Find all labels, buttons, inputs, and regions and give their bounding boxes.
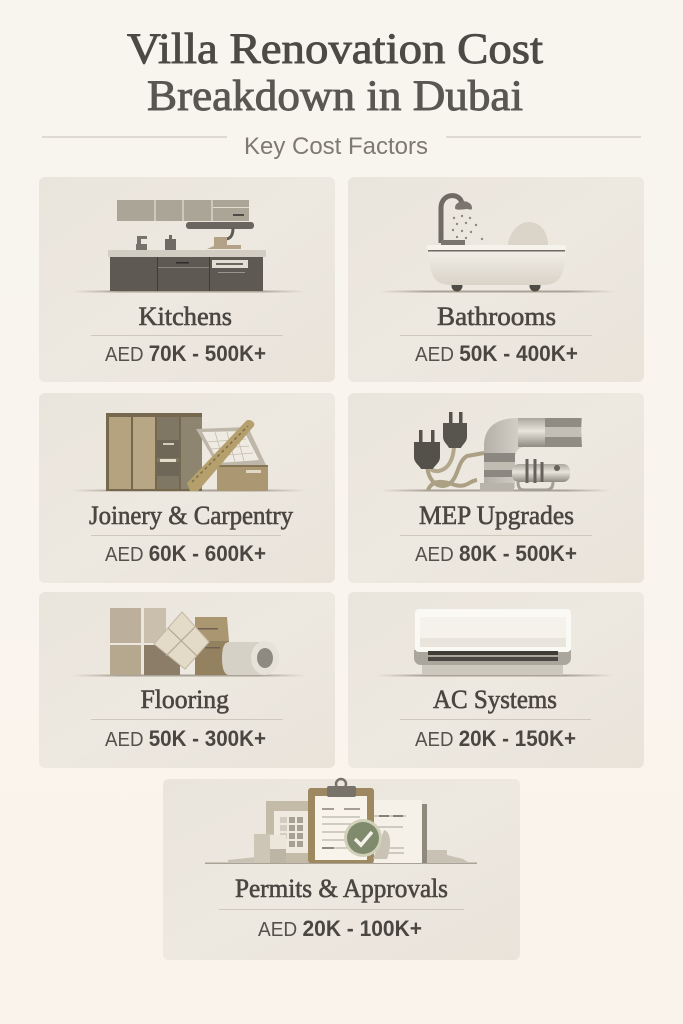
label: permits and approvals: Permits & Approvals [235,874,448,903]
label: joinery and carpentry: Joinery & Carpentry [89,501,293,530]
panel: AC systems [348,592,644,768]
label: MEP upgrades: MEP Upgrades [419,501,574,530]
label: AC systems: AC Systems [433,685,557,714]
panel: bathrooms [348,177,644,382]
panel: kitchens [39,177,335,382]
icon: kitchen [72,200,305,292]
price: bathrooms: AED 50K - 400K+ [415,341,578,366]
price: kitchens: AED 70K - 500K+ [105,341,266,366]
label: kitchens: Kitchens [138,302,232,331]
title: Breakdown in Dubai [147,73,523,120]
title: Villa Renovation Cost [127,26,543,73]
panel: flooring [39,592,335,768]
icon: bathtub with shower [380,196,615,292]
price: permits and approvals: AED 20K - 100K+ [258,916,422,941]
title [127,26,543,120]
panel: joinery and carpentry [39,393,335,583]
icon: cabinet and ruler [72,413,305,492]
icon: plugs and pipes [380,412,611,492]
price: joinery and carpentry: AED 60K - 600K+ [105,541,266,566]
price: flooring: AED 50K - 300K+ [105,726,266,751]
price: AC systems: AED 20K - 150K+ [415,726,576,751]
label: bathrooms: Bathrooms [437,302,556,331]
icon: clipboard and approval stamp [205,779,477,864]
panel: MEP upgrades [348,393,644,583]
icon: tiles, planks and roll [72,608,305,676]
label: flooring: Flooring [140,685,229,714]
icon: air conditioner [376,609,614,676]
price: MEP upgrades: AED 80K - 500K+ [415,541,577,566]
panel: permits and approvals [163,779,520,960]
subtitle: key cost factors: Key Cost Factors [244,133,428,160]
